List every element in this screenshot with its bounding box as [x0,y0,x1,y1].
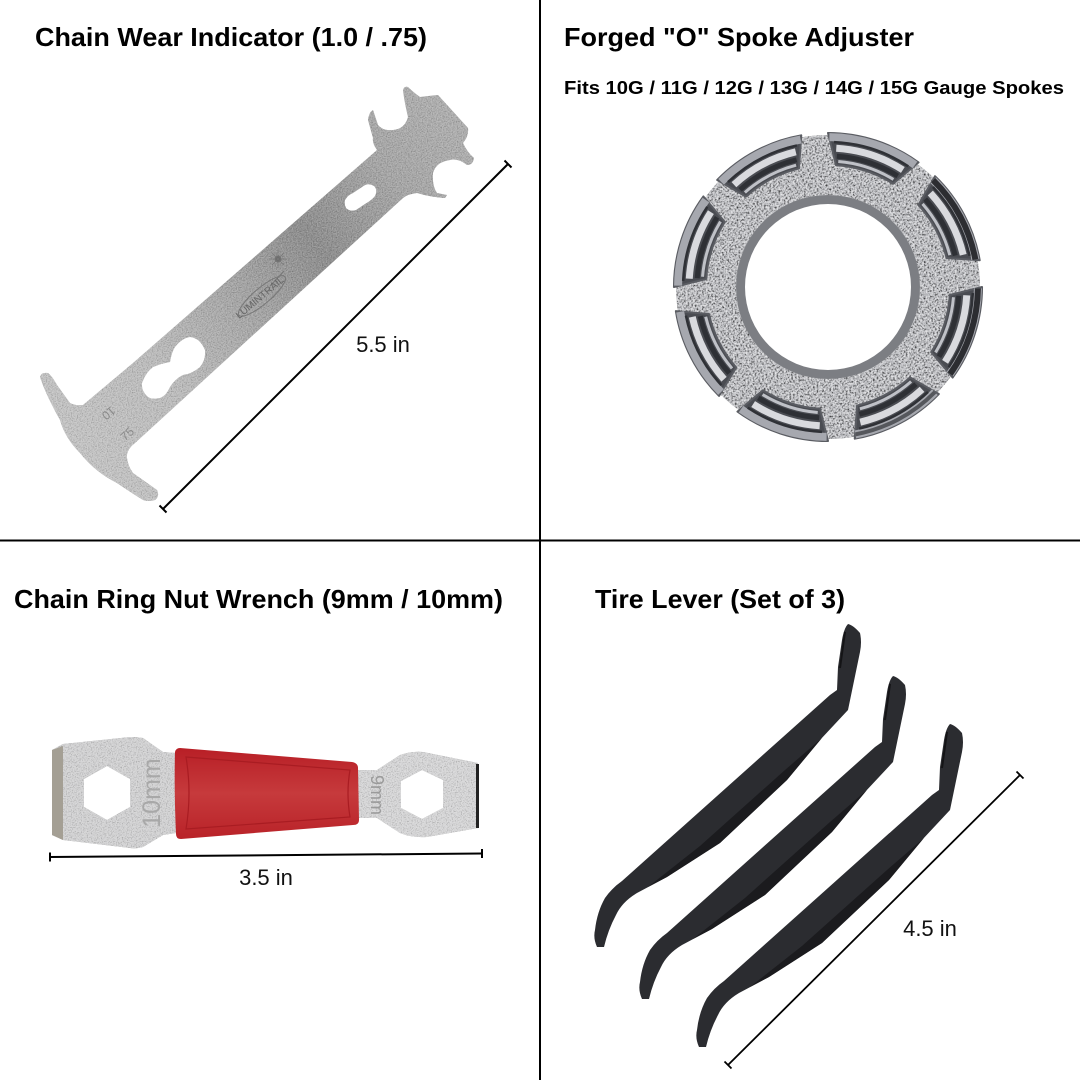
subheading: gauge sizes: Fits 10G / 11G / 12G / 13G / 14G / 15G Gauge Spokes [564,78,1064,98]
tool: chain ring nut wrench [52,737,479,848]
grid divider: horizontal [0,540,1080,542]
dimension line: 4.5 in [724,772,1024,1068]
logo stamp [234,250,290,321]
logo stamp: LUMINTRAIL [234,274,287,321]
dimension label: 3.5 in: 3.5 in [239,865,293,890]
grid divider: vertical [539,0,541,1080]
panel: spoke adjuster [564,22,1064,448]
spoke slots [667,126,989,448]
panel: tire lever [594,584,1024,1068]
stamp: 9mm: 9mm [367,775,387,815]
heading: chain ring nut wrench: Chain Ring Nut Wrench (9mm / 10mm) [14,584,503,614]
panel: chain ring nut wrench [14,584,503,890]
heading: tire lever: Tire Lever (Set of 3) [595,584,845,614]
stamp: 10: 10 [99,403,118,423]
red grip [175,748,359,839]
heading: spoke adjuster: Forged "O" Spoke Adjuster [564,22,914,52]
tool: tire lever 3 [696,724,963,1047]
dimension label: 5.5 in: 5.5 in [356,332,410,357]
dimension line: 5.5 in [160,160,512,512]
tool: tire lever 1 [594,624,861,947]
stamp: 10mm: 10mm [138,758,166,828]
panel: chain wear indicator [35,22,512,512]
dimension line: 3.5 in [50,849,482,862]
dimension label: 4.5 in: 4.5 in [903,916,957,941]
tool: chain wear indicator [40,87,474,501]
tool: spoke adjuster ring [667,126,989,448]
stamp: .75: 75 [118,424,137,444]
tool: tire lever 2 [639,676,906,999]
heading: chain wear indicator: Chain Wear Indicator (1.0 / .75) [35,22,427,52]
